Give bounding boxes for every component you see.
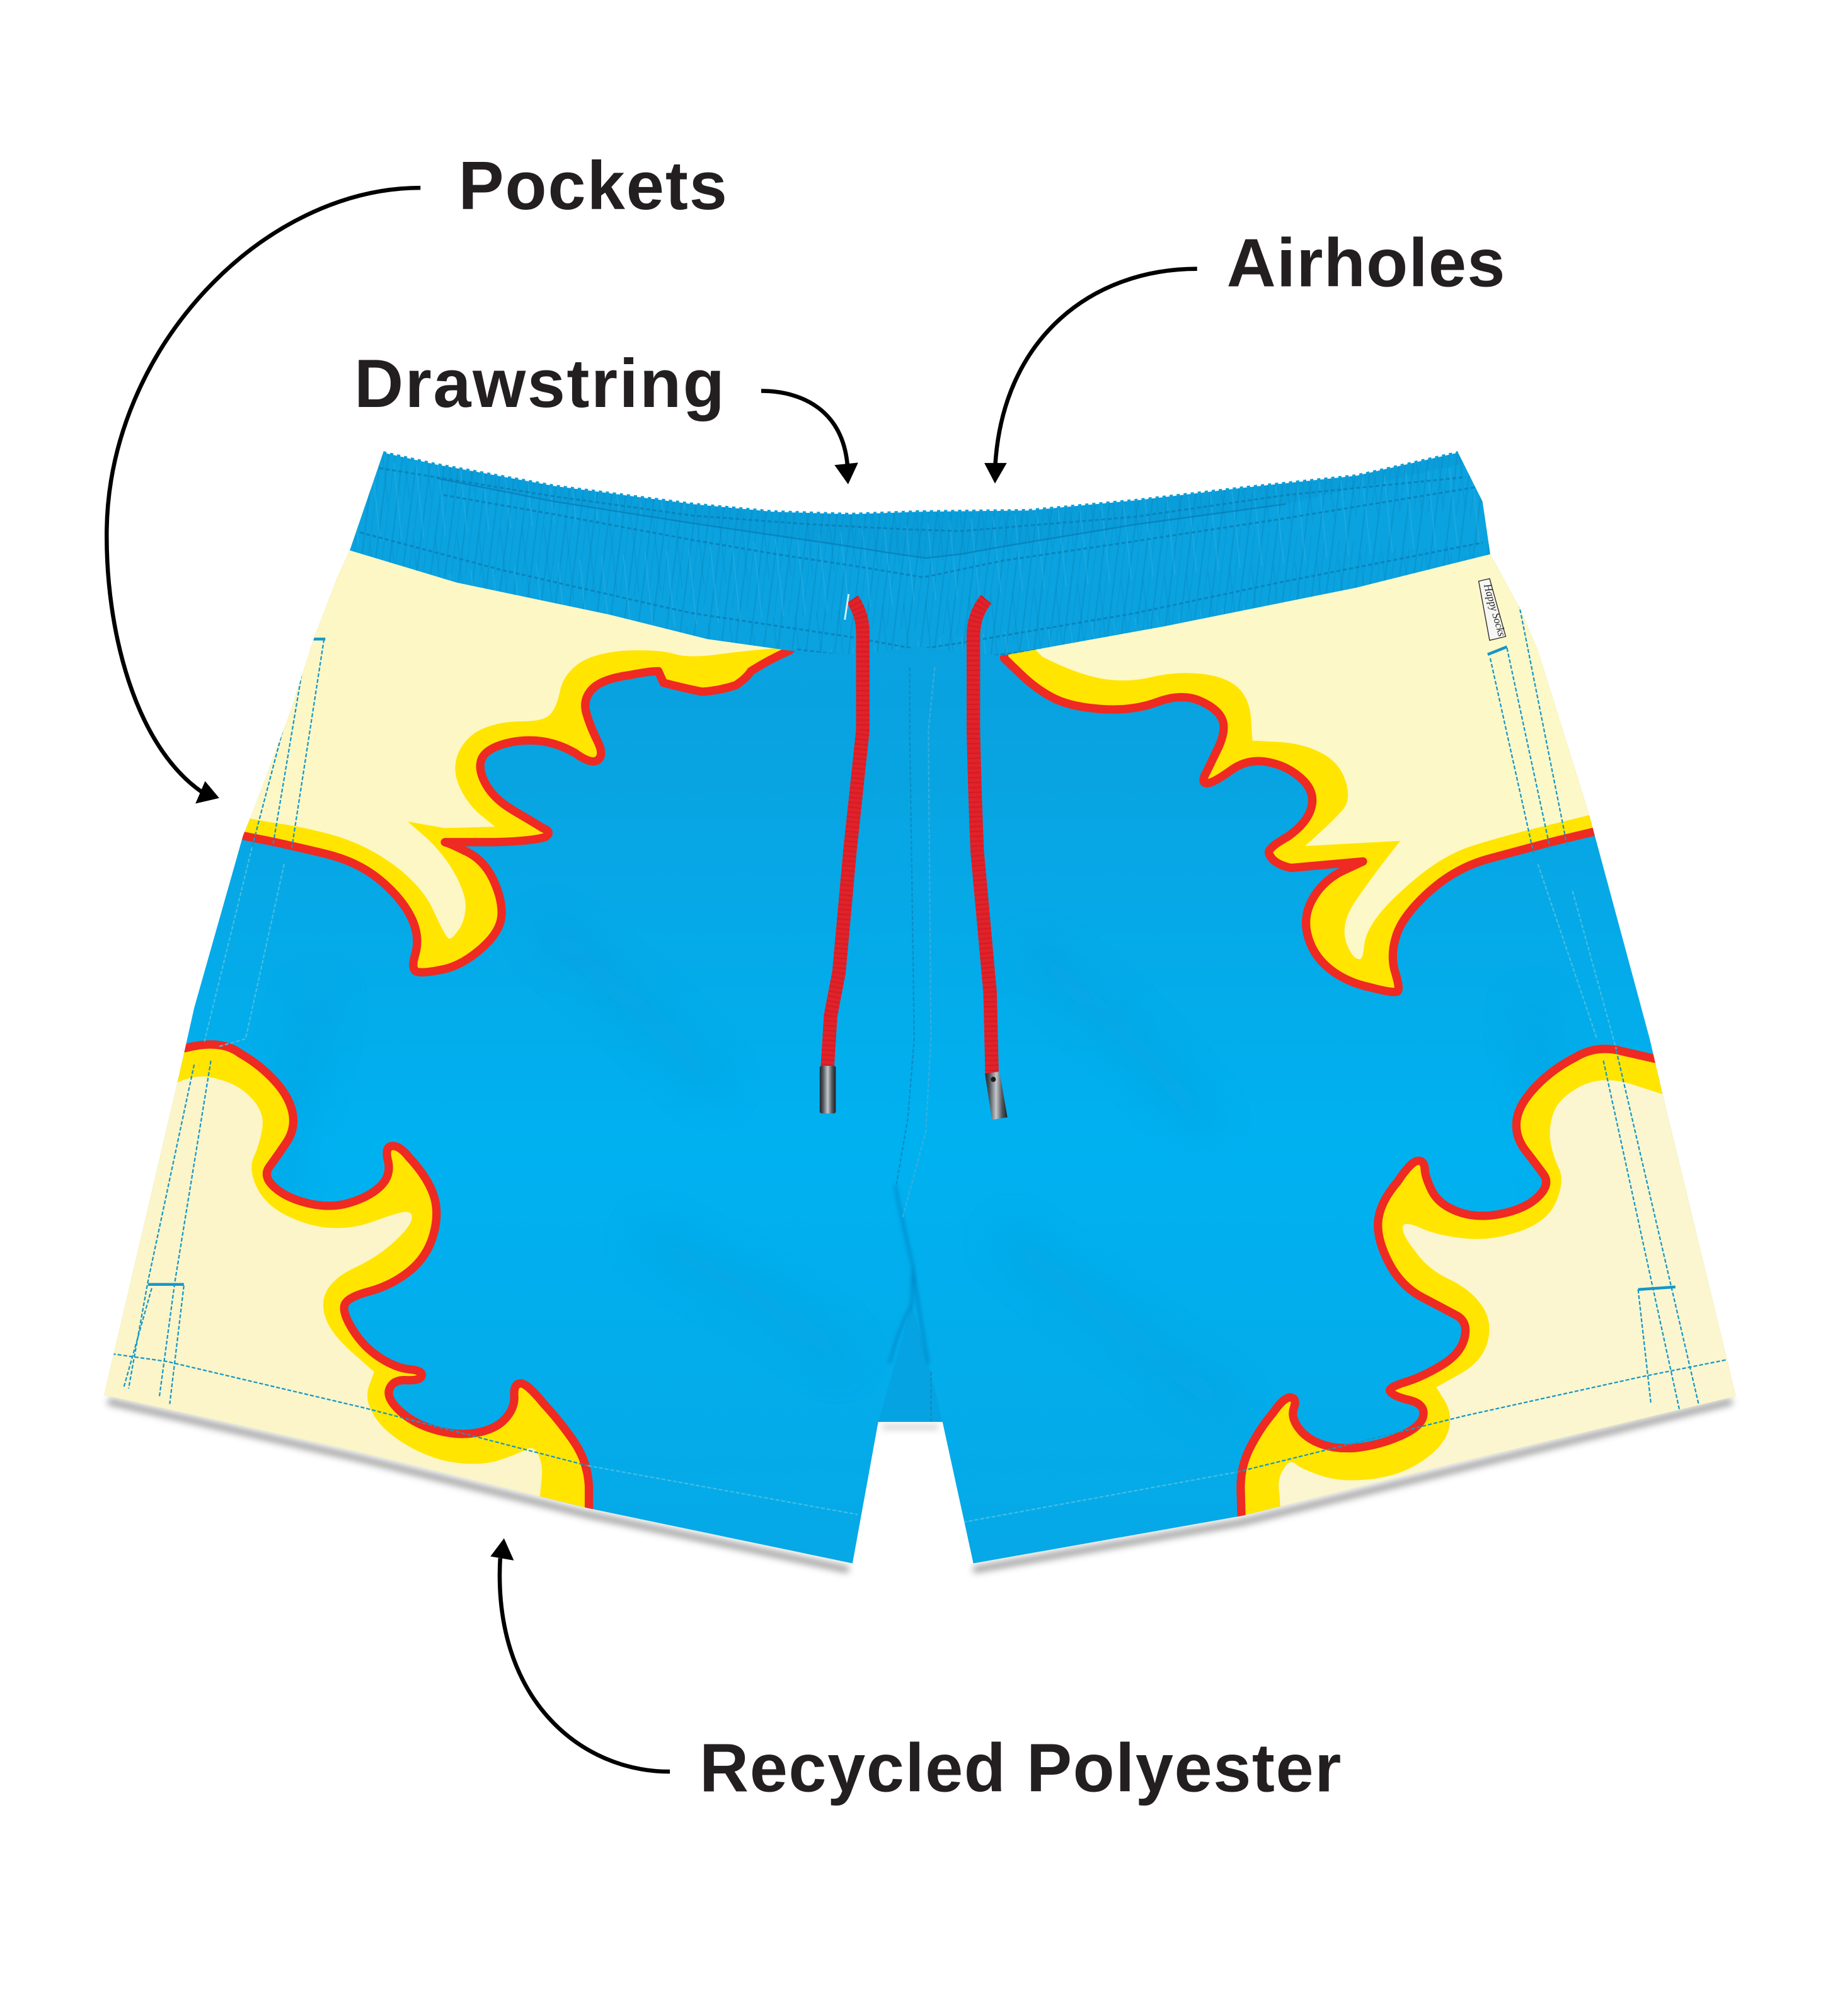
- infographic: swim shorts with feature callouts: [104, 159, 1736, 1806]
- label: Recycled Polyester: Recycled Polyester: [699, 1730, 1341, 1806]
- shorts body: [77, 425, 1762, 1581]
- fabric shading: [244, 925, 1594, 1414]
- crotch fold: [890, 1186, 928, 1363]
- arrow: Airholes: [984, 269, 1197, 483]
- shadow under hem: [108, 1401, 1732, 1570]
- waistband gathered top edge: [383, 452, 1458, 514]
- flame: bottom left: [77, 1045, 589, 1543]
- flame: bottom right: [1241, 1049, 1762, 1543]
- waistband: [350, 452, 1490, 656]
- label: Drawstring: Drawstring: [354, 345, 725, 421]
- label: Pockets: Pockets: [458, 147, 727, 224]
- flame: top left: [242, 452, 795, 976]
- arrow: Recycled Polyester: [490, 1538, 670, 1772]
- label: Airholes: Airholes: [1227, 225, 1505, 301]
- arrow: Pockets: [106, 188, 420, 804]
- drawstring: left cord: [820, 594, 863, 1113]
- stitching: [112, 570, 1731, 1522]
- swim shorts: [77, 425, 1762, 1581]
- back of waistband: [437, 437, 1466, 558]
- crotch back panel: [878, 1305, 943, 1422]
- brand label: Happy Socks: [1481, 581, 1509, 638]
- drawstring: right cord: [974, 599, 1008, 1120]
- flame: top right: [999, 452, 1595, 997]
- arrow: Drawstring: [761, 391, 858, 484]
